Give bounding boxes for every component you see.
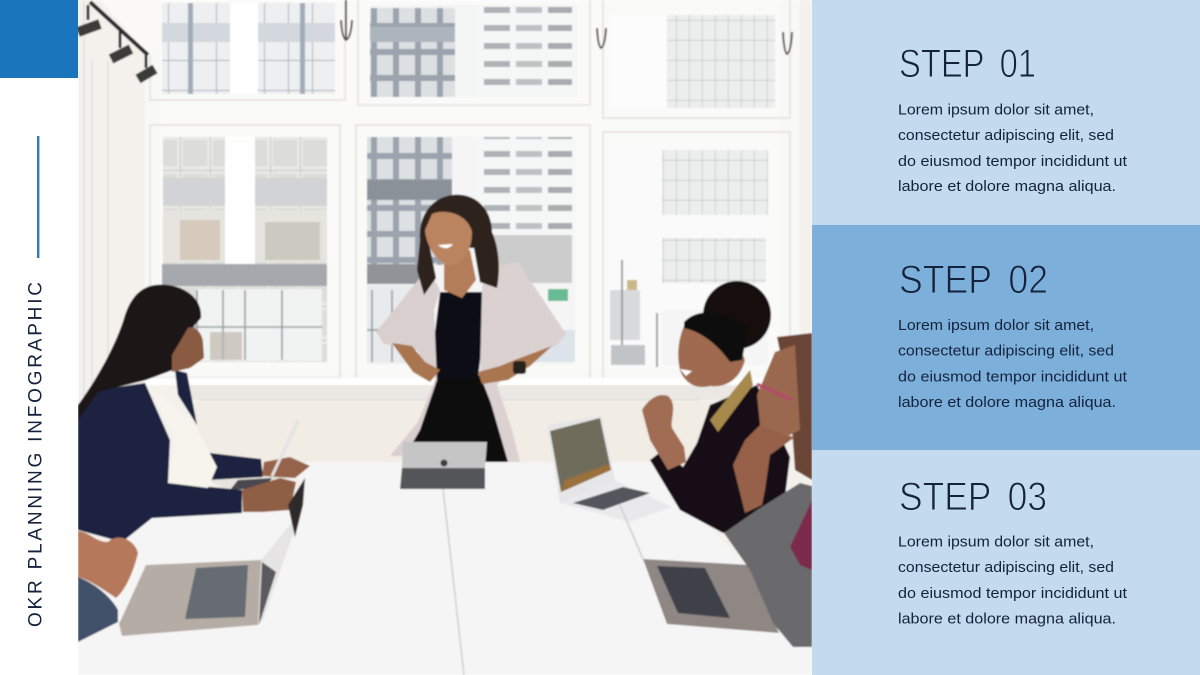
clasped hands bottom left [78,531,138,598]
step 02 heading: STEP 02 [899,258,1048,302]
tablet on stand [400,442,487,489]
left pilaster [84,0,108,400]
window frame edges [150,0,790,382]
vertical accent line [37,136,39,258]
neck [444,250,476,298]
face [172,327,204,372]
step 01 body text [898,102,1128,195]
face [678,326,745,387]
step 03 body text: Lorem ipsum dolor sit amet, [898,534,1094,550]
woman with glasses [724,333,812,647]
face [757,345,800,440]
glasses [757,384,792,400]
grey blazer [724,483,812,647]
hands [642,395,686,470]
step 03 body text [898,534,1128,628]
second sleeve [210,453,263,480]
laptop behind [212,476,286,489]
step 03 heading: STEP 03 [899,475,1047,519]
blouse [168,430,218,490]
headband [684,313,748,362]
hair [777,333,812,480]
tablet edge [272,421,298,476]
bun [703,281,771,349]
vertical title: OKR PLANNING INFOGRAPHIC [26,282,46,627]
step 03 body text: labore et dolore magna aliqua. [898,610,1116,628]
middle laptop [547,415,672,522]
hair [78,285,201,420]
step 01 heading: STEP 01 [899,42,1036,86]
hanging window hooks [341,0,792,54]
top pane right [666,14,776,108]
woman with headband [642,281,790,533]
step 01 body text: Lorem ipsum dolor sit amet, [898,102,1094,118]
watch [513,361,526,374]
step 02 background [812,225,1200,450]
sleeve bottom left [78,577,118,642]
standing woman [376,195,566,462]
arms [392,343,552,384]
panel: step 01 [812,0,1200,225]
jacket far lapel [175,370,197,425]
blazer right [480,262,566,462]
collar [710,370,753,432]
step 02 body text: do eiusmod tempor incididunt ut [898,368,1128,386]
step 02 body text: Lorem ipsum dolor sit amet, [898,317,1094,334]
hand [242,478,296,512]
bottom pane left [162,137,327,362]
step 01 body text: labore et dolore magna aliqua. [898,178,1116,195]
bottom pane middle [367,137,575,365]
photo: team meeting around a white table [78,0,812,675]
step 01 background [812,0,1200,225]
body [650,385,790,533]
teeth [680,369,692,376]
face [425,212,472,265]
step 03 background [812,450,1200,675]
track lights [78,2,155,79]
jacket [78,383,242,542]
panel: step 02 [812,225,1200,450]
step 03 body text: consectetur adipiscing elit, sed [898,559,1114,576]
haze over the window views [160,0,780,370]
black top [434,292,482,378]
wall [78,0,812,564]
step 02 body text: labore et dolore magna aliqua. [898,394,1116,411]
step 02 body text [898,317,1128,411]
top pane middle [370,5,577,97]
shirt [790,500,812,570]
table [685,510,707,522]
bottom pane right [610,148,768,368]
step 02 body text: consectetur adipiscing elit, sed [898,342,1114,360]
step 01 body text: do eiusmod tempor incididunt ut [898,153,1128,170]
hair [417,195,499,295]
panel: step 03 [812,450,1200,675]
step 01 body text: consectetur adipiscing elit, sed [898,127,1114,144]
step 03 body text: do eiusmod tempor incididunt ut [898,585,1128,602]
front left laptop [119,475,305,636]
top pane left [162,3,335,94]
window sill and wainscot [145,378,800,385]
blazer left [376,268,440,456]
smile [438,244,453,248]
window frame [145,0,800,385]
hand [733,425,795,513]
trousers [405,375,514,462]
woman on the left [78,285,310,542]
front right laptop [620,505,779,633]
blue corner block [0,0,78,78]
ceiling bulkhead [102,0,152,56]
